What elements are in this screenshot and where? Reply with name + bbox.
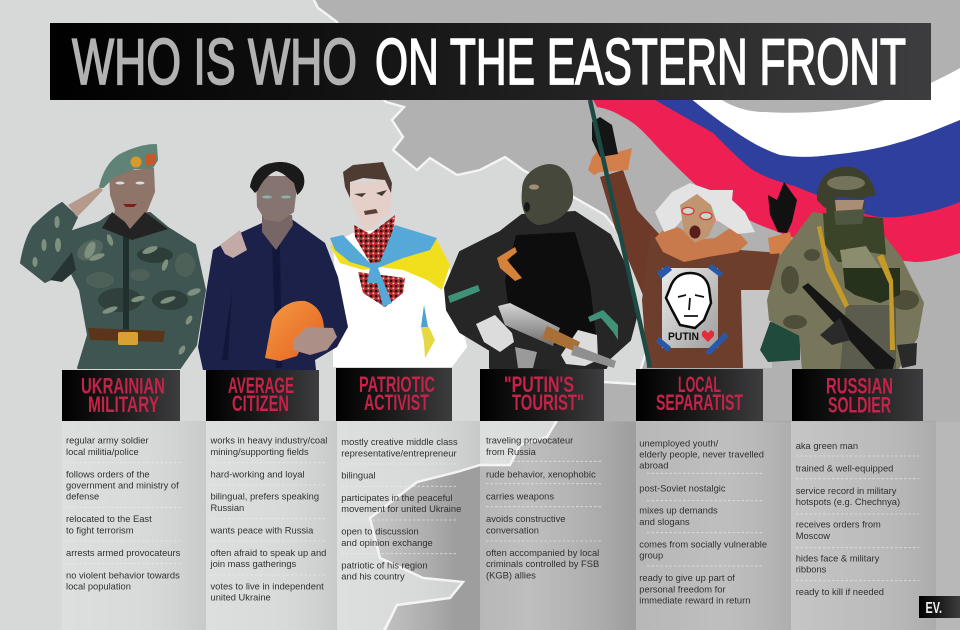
face mask	[834, 209, 865, 225]
header: TOURIST"	[512, 390, 584, 415]
poster caption: PUTIN	[668, 331, 699, 343]
description list: conversation	[486, 525, 539, 535]
description list	[210, 436, 327, 603]
background: lighter ground behind the right-hand figures	[738, 285, 772, 368]
Russian flag	[592, 68, 960, 262]
dark vest	[505, 232, 596, 345]
embroidered collar	[354, 215, 395, 267]
description list: votes to live in independent	[210, 582, 324, 592]
raised left arm	[600, 170, 660, 300]
description list: immediate reward in return	[639, 595, 750, 605]
description list: unemployed youth/	[639, 438, 719, 448]
description list: (KGB) allies	[486, 570, 536, 580]
figure: Ukrainian military	[21, 145, 205, 368]
belt and buckle	[88, 328, 165, 345]
description list: Russian	[210, 503, 244, 513]
EV logo: EV.	[926, 600, 942, 617]
Putin face outline	[666, 273, 711, 328]
description list: regular army soldier	[66, 436, 149, 446]
description list	[486, 436, 602, 580]
description list: hotspots (e.g. Chechnya)	[796, 497, 900, 507]
description list: ready to give up part of	[639, 573, 735, 583]
description list	[796, 441, 919, 597]
pole	[590, 100, 650, 367]
map detail: white coastline over strip	[370, 422, 556, 630]
description list: often afraid to speak up and	[210, 548, 326, 558]
header: "PUTIN'S	[504, 372, 574, 397]
description list: aka green man	[796, 441, 858, 451]
description list: to fight terrorism	[66, 525, 134, 535]
description list: elderly people, never travelled	[639, 450, 764, 460]
description list: works in heavy industry/coal	[210, 436, 327, 446]
EV logo	[919, 596, 960, 618]
beret	[100, 145, 157, 187]
embroidered chest	[358, 272, 405, 307]
balaclava	[825, 200, 865, 250]
fur cuff left	[588, 148, 632, 175]
flag: blue band	[650, 98, 960, 220]
description list: representative/entrepreneur	[341, 448, 457, 458]
orange hard hat	[265, 301, 324, 361]
description list: arrests armed provocateurs	[66, 548, 181, 558]
Putin poster	[656, 264, 728, 355]
header	[792, 369, 923, 421]
title: grey part: WHO IS WHO	[72, 25, 357, 98]
description list: from Russia	[486, 447, 537, 457]
description list: and his country	[341, 572, 405, 582]
description list	[639, 438, 767, 605]
dark green chest armour	[843, 268, 900, 303]
eyes	[835, 200, 864, 211]
white shirt	[333, 227, 467, 367]
description list: participates in the peaceful	[341, 493, 452, 503]
open mouth	[690, 226, 700, 238]
description list: movement for united Ukraine	[341, 504, 461, 514]
header: CITIZEN	[232, 391, 289, 416]
brown hair	[343, 162, 392, 198]
brown coat	[642, 235, 780, 368]
face	[256, 176, 296, 222]
facial features	[354, 190, 387, 215]
eyes	[262, 196, 291, 198]
white glove right	[561, 330, 598, 366]
header: ACTIVIST	[364, 390, 429, 415]
fur cuff right	[768, 232, 793, 254]
header: RUSSIAN	[826, 373, 893, 398]
grey lower torso	[840, 305, 896, 370]
face	[680, 194, 716, 243]
description list: rude behavior, xenophobic	[486, 469, 596, 479]
blue tape corners	[656, 264, 728, 355]
neck and head	[348, 180, 392, 232]
camouflage blobs	[32, 216, 202, 356]
description list: ribbons	[796, 565, 827, 575]
black jacket	[445, 212, 638, 368]
description list: carries weapons	[486, 492, 554, 502]
header: SEPARATIST	[656, 390, 743, 415]
header: PATRIOTIC	[359, 372, 435, 397]
Ukrainian flag scarf: blue	[330, 225, 437, 307]
lower grey background	[360, 422, 960, 630]
beret badges	[130, 153, 155, 168]
description list: join mass gatherings	[210, 559, 297, 569]
Ukrainian flag scarf: yellow	[330, 232, 450, 290]
flag: white band	[688, 68, 960, 158]
description list: no violent behavior towards	[66, 570, 180, 580]
description list: ready to kill if needed	[796, 587, 884, 597]
description list: defense	[66, 492, 99, 502]
title bar	[50, 23, 931, 100]
olive jacket	[768, 213, 923, 370]
description list: receives orders from	[796, 520, 881, 530]
navy shirt	[198, 220, 348, 370]
description list: and opinion exchange	[341, 538, 433, 548]
column: average citizen	[206, 370, 327, 603]
header	[480, 369, 604, 421]
gloves	[820, 318, 917, 368]
St George ribbon	[497, 247, 522, 281]
saluting hand	[68, 187, 103, 217]
header	[62, 370, 180, 421]
description list: patriotic of his region	[341, 560, 428, 570]
header: MILITARY	[88, 392, 159, 417]
heart	[702, 330, 714, 342]
poster card	[662, 268, 718, 348]
description list: abroad	[639, 461, 668, 471]
green armbands	[588, 310, 618, 340]
description list: Moscow	[796, 531, 830, 541]
launcher tube	[760, 322, 800, 362]
description list: local population	[66, 582, 131, 592]
black hair	[250, 162, 304, 195]
black glove left	[592, 117, 618, 157]
hand holding hat	[293, 327, 337, 355]
description list: avoids constructive	[486, 514, 565, 524]
description list: follows orders of the	[66, 469, 150, 479]
description list: hides face & military	[796, 553, 880, 563]
description list: trained & well-equipped	[796, 464, 893, 474]
description list: post-Soviet nostalgic	[639, 483, 726, 493]
description list: wants peace with Russia	[210, 525, 314, 535]
description list	[66, 436, 183, 592]
flag: red band	[592, 98, 960, 262]
description list: often accompanied by local	[486, 548, 599, 558]
red glasses	[682, 207, 712, 220]
description list: hard-working and loyal	[210, 469, 305, 479]
figure: average citizen	[198, 162, 348, 370]
description list: mostly creative middle class	[341, 437, 458, 447]
header: SOLDIER	[828, 392, 891, 418]
white hair	[655, 183, 755, 234]
column strips	[62, 421, 936, 630]
white glove left	[476, 315, 514, 352]
description list: relocated to the East	[66, 514, 152, 524]
description list: local militia/police	[66, 447, 139, 457]
background: light map of Ukraine with white border	[0, 0, 650, 630]
description list	[341, 437, 461, 582]
description list: bilingual	[341, 471, 376, 481]
goggles	[827, 176, 865, 190]
rifle	[802, 283, 895, 372]
description list: personal freedom for	[639, 584, 726, 594]
hand on shoulder	[220, 230, 247, 258]
description list: criminals controlled by FSB	[486, 559, 599, 569]
chest plate	[840, 246, 880, 268]
description list: group	[639, 551, 663, 561]
dark collar	[823, 213, 886, 262]
column: Putin's tourist	[480, 369, 604, 580]
collar	[102, 212, 168, 240]
header	[206, 370, 319, 421]
camouflage uniform	[21, 203, 205, 368]
description list: government and ministry of	[66, 480, 179, 490]
balaclava	[522, 164, 573, 225]
neck and face	[109, 168, 155, 232]
small Ukraine-shaped ribbon	[421, 305, 435, 358]
figure: Putin's tourist	[445, 164, 638, 368]
column: local separatist	[636, 369, 767, 605]
figure: local separatist	[588, 100, 797, 368]
description list: service record in military	[796, 486, 897, 496]
header: UKRAINIAN	[81, 373, 165, 398]
figure: Russian soldier	[760, 167, 923, 372]
description list: bilingual, prefers speaking	[210, 492, 319, 502]
header	[636, 369, 763, 421]
rifle	[498, 303, 616, 368]
column: Russian soldier	[792, 369, 923, 597]
helmet	[817, 167, 876, 208]
description list: and slogans	[639, 517, 690, 527]
Putin face features	[678, 295, 704, 316]
description list: traveling provocateur	[486, 436, 573, 446]
header: LOCAL	[678, 372, 721, 397]
description list: mixes up demands	[639, 506, 718, 516]
column: Ukrainian military	[62, 370, 183, 592]
column: patriotic activist	[336, 368, 461, 582]
figure: patriotic activist	[330, 162, 467, 367]
fur collar	[655, 225, 748, 262]
description list: comes from socially vulnerable	[639, 539, 767, 549]
camouflage patches	[781, 249, 919, 329]
header: AVERAGE	[228, 373, 294, 398]
yellow straps	[817, 226, 895, 350]
description list: united Ukraine	[210, 593, 271, 603]
eye and mouth openings	[524, 184, 539, 212]
header	[336, 368, 452, 421]
description list: mining/supporting fields	[210, 447, 309, 457]
black raised glove right	[768, 182, 797, 233]
eyes and mouth	[116, 182, 144, 207]
neck	[262, 215, 293, 250]
shirt folds	[222, 240, 282, 368]
description list: open to discussion	[341, 527, 419, 537]
